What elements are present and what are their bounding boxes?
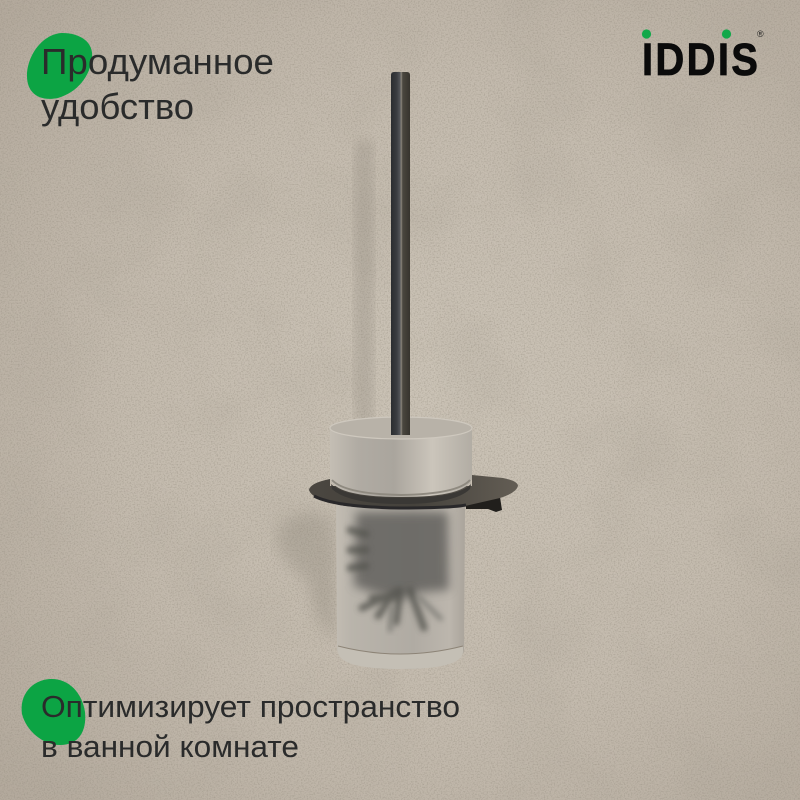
product: toilet brush holder [309, 72, 518, 669]
heading text: Продуманное [41, 41, 274, 82]
rod [391, 72, 410, 435]
rod shadow on wall [354, 140, 374, 425]
green blob: caption [22, 679, 85, 745]
mounting plate [309, 475, 518, 509]
logo: IDDIS: IDDIS [642, 35, 758, 86]
green blob: heading [27, 33, 92, 99]
logo: IDDIS: ® [757, 29, 764, 39]
caption block: в ванной комнате [41, 729, 299, 764]
caption block [22, 679, 460, 764]
holder shadow on wall [276, 512, 336, 640]
heading block [27, 33, 274, 127]
glass cup lower part [336, 505, 465, 669]
heading block: удобство [41, 86, 194, 127]
caption text: Оптимизирует пространство [41, 689, 460, 724]
glass cup upper part [330, 427, 472, 497]
brush head seen through frosted glass [350, 512, 449, 632]
wall mount bracket [466, 497, 502, 512]
